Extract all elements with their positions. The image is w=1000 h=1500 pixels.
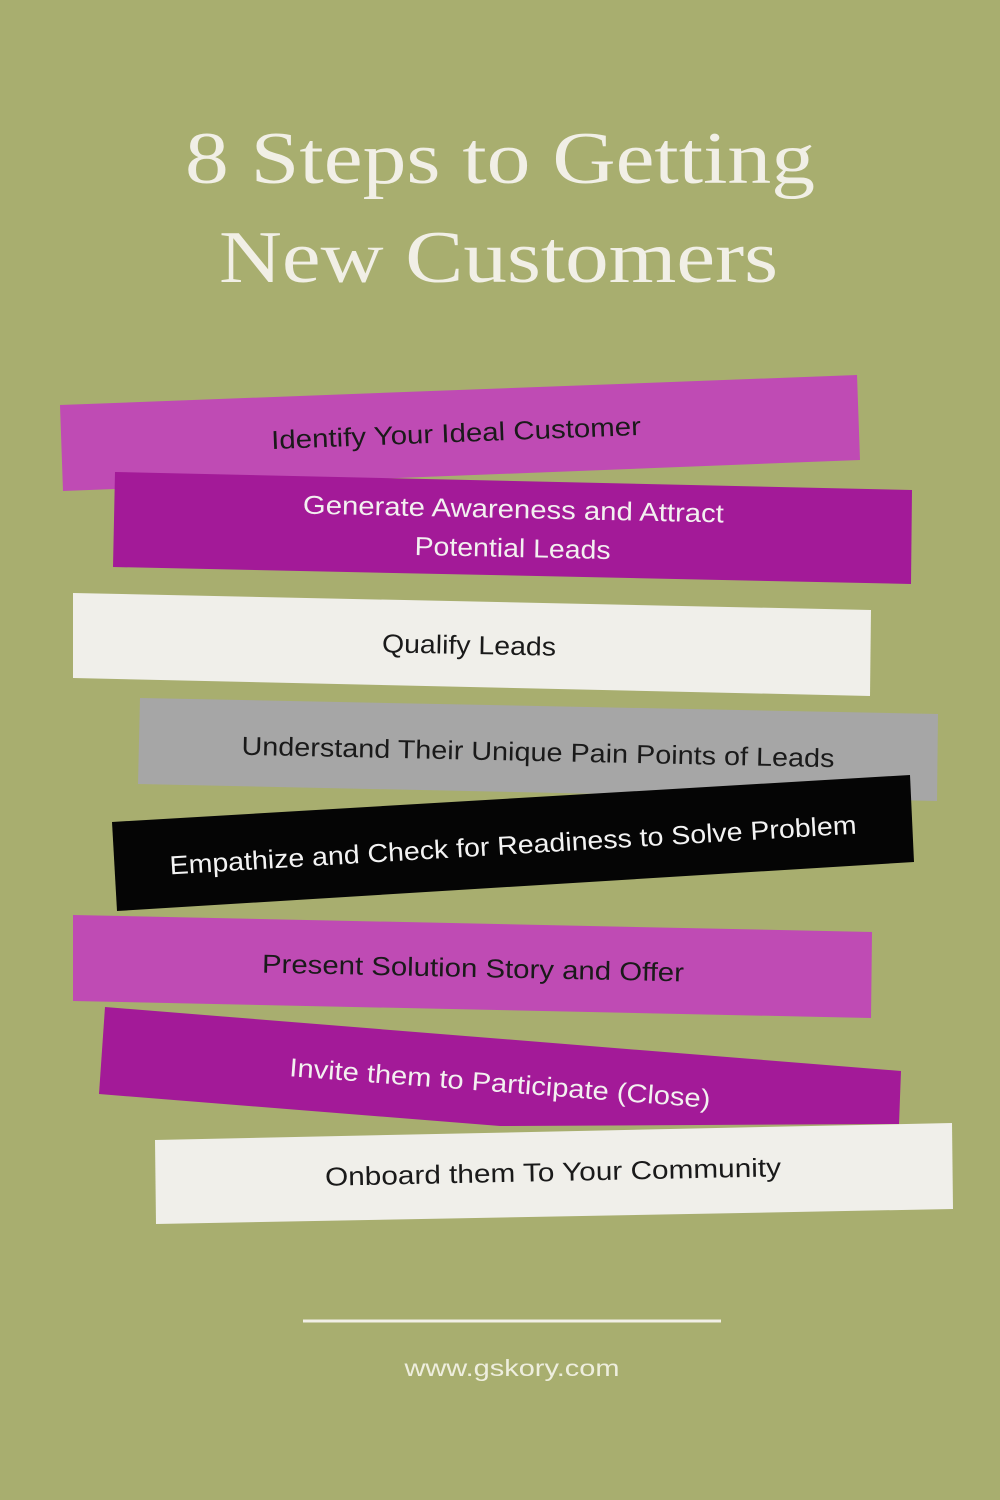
step 2 bar: Potential Leads bbox=[414, 531, 611, 565]
step 2 bar: Generate Awareness and Attract bbox=[303, 490, 725, 528]
step 3 bar: Qualify Leads bbox=[382, 628, 556, 662]
step 6 bar bbox=[73, 915, 872, 1018]
step 8 bar: Onboard them To Your Community bbox=[325, 1152, 781, 1192]
title: 8 Steps to Getting bbox=[185, 118, 815, 200]
step 7 bar bbox=[99, 1007, 901, 1126]
step 4 bar: Understand Their Unique Pain Points of Leads bbox=[241, 731, 835, 773]
step 5 bar bbox=[112, 775, 914, 911]
step 1 bar bbox=[60, 375, 860, 491]
step 1 bar: Identify Your Ideal Customer bbox=[271, 411, 642, 455]
step 5 bar: Empathize and Check for Readiness to Solve Problem bbox=[169, 810, 857, 880]
step 3 bar bbox=[73, 593, 871, 696]
step 6 bar: Present Solution Story and Offer bbox=[262, 949, 685, 987]
step 2 bar bbox=[113, 472, 912, 584]
website url: www.gskory.com bbox=[403, 1355, 620, 1381]
title bbox=[185, 118, 815, 299]
step 7 bar: Invite them to Participate (Close) bbox=[288, 1052, 712, 1114]
title: New Customers bbox=[219, 217, 778, 299]
step 8 bar bbox=[155, 1123, 953, 1224]
step 4 bar bbox=[138, 698, 938, 801]
